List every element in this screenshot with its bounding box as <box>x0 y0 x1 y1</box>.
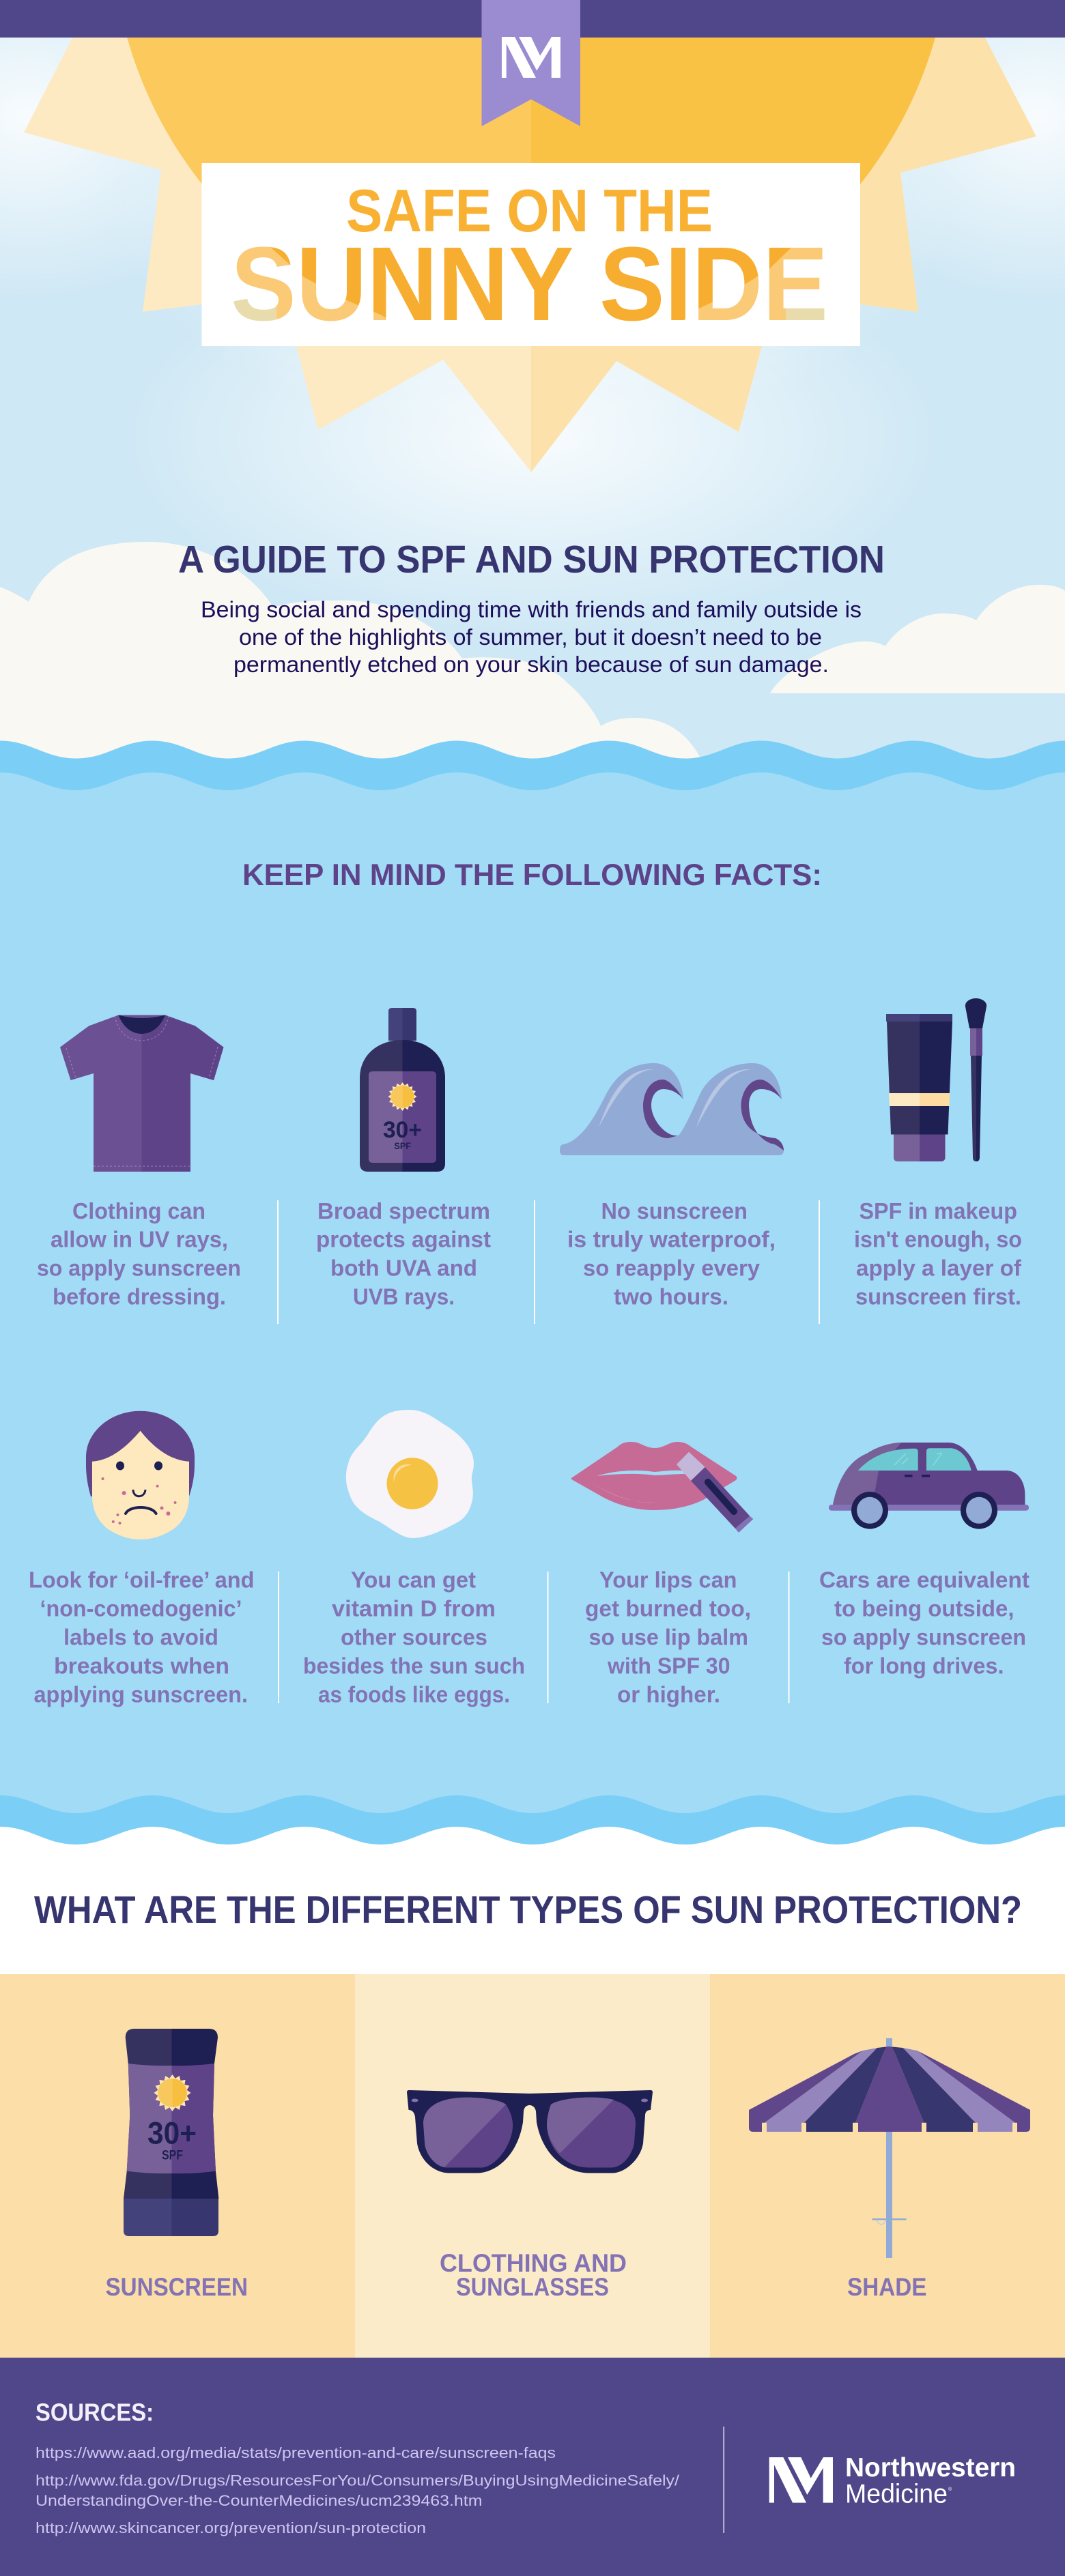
clouds <box>0 542 1065 768</box>
logo: Northwestern Medicine: Northwestern <box>845 2453 1016 2483</box>
fact text: vitamin D: as foods like eggs. <box>318 1683 510 1707</box>
fact text: cars: for long drives. <box>844 1654 1004 1679</box>
fact text: waterproof: so reapply every <box>583 1256 760 1282</box>
fact text: broad spectrum: Broad spectrum <box>317 1199 490 1224</box>
fact text: vitamin D: besides the sun such <box>303 1654 525 1679</box>
icon: lips with balm <box>571 1442 753 1533</box>
icon: sunglasses <box>407 2090 653 2173</box>
fact text: makeup: isn't enough, so <box>854 1227 1022 1253</box>
label: clothing and sunglasses: SUNGLASSES <box>456 2272 609 2301</box>
icon: t-shirt <box>60 1015 224 1172</box>
fact text: vitamin D: vitamin D from <box>332 1597 496 1621</box>
source links <box>36 2444 680 2536</box>
title panel <box>202 163 860 346</box>
icon: ribbon logo mark <box>502 37 560 78</box>
icon: sunscreen bottle: SPF <box>395 1140 411 1151</box>
icon: makeup tube and brush <box>886 998 986 1161</box>
fact text: cars: to being outside, <box>834 1597 1014 1621</box>
source links: https://www.aad.org/media/stats/prevention-and-care/sunscreen-faqs <box>36 2444 556 2461</box>
fact text: waterproof: two hours. <box>614 1284 728 1310</box>
fact text: lips: so use lip balm <box>588 1625 748 1650</box>
fact text: lips: Your lips can <box>599 1568 737 1593</box>
label: shade: SHADE <box>847 2272 927 2301</box>
logo: Northwestern Medicine: Medicine <box>845 2480 948 2509</box>
source links: http://www.skincancer.org/prevention/sun-protection <box>36 2519 426 2536</box>
intro paragraph <box>201 596 862 677</box>
fact text: oil-free <box>29 1568 254 1707</box>
fact text: waterproof: is truly waterproof, <box>567 1227 776 1253</box>
fact text: cars <box>819 1568 1030 1679</box>
fact text: broad spectrum: both UVA and <box>330 1256 477 1282</box>
icon: sunscreen bottle: 30+ <box>383 1117 422 1143</box>
sun illustration <box>24 0 1036 472</box>
title line one: SAFE ON THE <box>346 177 713 244</box>
icon: sunscreen tube <box>124 2029 218 2236</box>
fact text: vitamin D: other sources <box>341 1625 487 1650</box>
fact text: makeup: sunscreen first. <box>855 1284 1021 1310</box>
intro paragraph: Being social and spending time with friends and family outside is <box>201 596 862 622</box>
label: clothing and sunglasses: CLOTHING AND <box>440 2248 627 2277</box>
heading: facts: KEEP IN MIND THE FOLLOWING FACTS: <box>242 858 822 892</box>
fact text: makeup <box>854 1199 1022 1310</box>
heading: sources: SOURCES: <box>36 2398 154 2427</box>
fact text: lips: get burned too, <box>585 1597 751 1621</box>
icon: beach umbrella <box>749 2038 1030 2258</box>
sky background <box>0 0 1065 819</box>
fact text: makeup: apply a layer of <box>856 1256 1022 1282</box>
fact text: clothing: allow in UV rays, <box>51 1227 228 1253</box>
fact text: broad spectrum: UVB rays. <box>353 1284 455 1310</box>
logo: Northwestern Medicine <box>769 2453 1016 2509</box>
ribbon with logo <box>482 0 580 126</box>
fact text: clothing: Clothing can <box>72 1199 205 1224</box>
icon: sunscreen tube: SPF <box>162 2148 183 2163</box>
icon: face with acne <box>86 1411 195 1539</box>
icon: ocean waves <box>560 1063 784 1155</box>
fact text: waterproof <box>567 1199 776 1310</box>
fact text: oil-free: labels to avoid <box>63 1625 218 1650</box>
row two dividers <box>278 1572 789 1703</box>
fact text: oil-free: applying sunscreen. <box>34 1683 248 1707</box>
fact text: makeup: SPF in makeup <box>859 1199 1017 1224</box>
fact text: oil-free: breakouts when <box>54 1654 229 1679</box>
fact text: lips <box>585 1568 751 1707</box>
label: sunscreen: SUNSCREEN <box>105 2272 248 2301</box>
intro paragraph: permanently etched on your skin because of sun damage. <box>233 652 829 677</box>
footer panel <box>0 2358 1065 2576</box>
water and waves <box>0 741 1065 1974</box>
panel: clothing and sunglasses <box>355 1974 710 2358</box>
icon: fried egg <box>346 1410 474 1538</box>
fact text: vitamin D: You can get <box>351 1568 476 1593</box>
icon: sunscreen bottle <box>360 1008 445 1172</box>
intro paragraph: one of the highlights of summer, but it doesn’t need to be <box>239 624 822 650</box>
fact text: broad spectrum: protects against <box>316 1227 491 1253</box>
top bar <box>0 0 1065 38</box>
fact text: oil-free: ‘non-comedogenic’ <box>40 1597 242 1621</box>
panel: shade <box>710 1974 1065 2358</box>
fact text: vitamin D <box>303 1568 525 1707</box>
title line two: SUNNY SIDE <box>231 225 828 343</box>
source links: UnderstandingOver-the-CounterMedicines/ucm239463.htm <box>36 2492 482 2509</box>
label: clothing and sunglasses <box>440 2248 627 2301</box>
heading: guide: A GUIDE TO SPF AND SUN PROTECTION <box>178 538 885 581</box>
fact text: lips: or higher. <box>617 1683 720 1707</box>
fact text: clothing: before dressing. <box>53 1284 226 1310</box>
panel: sunscreen <box>0 1974 355 2358</box>
logo: Northwestern Medicine: ® <box>948 2487 952 2492</box>
fact text: clothing <box>37 1199 241 1310</box>
row one dividers <box>277 1200 820 1324</box>
fact text: broad spectrum <box>316 1199 491 1310</box>
icon: sunscreen tube: 30+ <box>147 2116 197 2151</box>
fact text: lips: with SPF 30 <box>607 1654 730 1679</box>
fact text: oil-free: Look for ‘oil-free’ and <box>29 1568 254 1593</box>
source links: http://www.fda.gov/Drugs/ResourcesForYou/Consumers/BuyingUsingMedicineSafely/ <box>36 2472 680 2489</box>
fact text: cars: Cars are equivalent <box>819 1568 1030 1593</box>
icon: car <box>829 1443 1029 1529</box>
fact text: cars: so apply sunscreen <box>821 1625 1026 1650</box>
fact text: waterproof: No sunscreen <box>601 1199 748 1224</box>
fact text: clothing: so apply sunscreen <box>37 1256 241 1282</box>
